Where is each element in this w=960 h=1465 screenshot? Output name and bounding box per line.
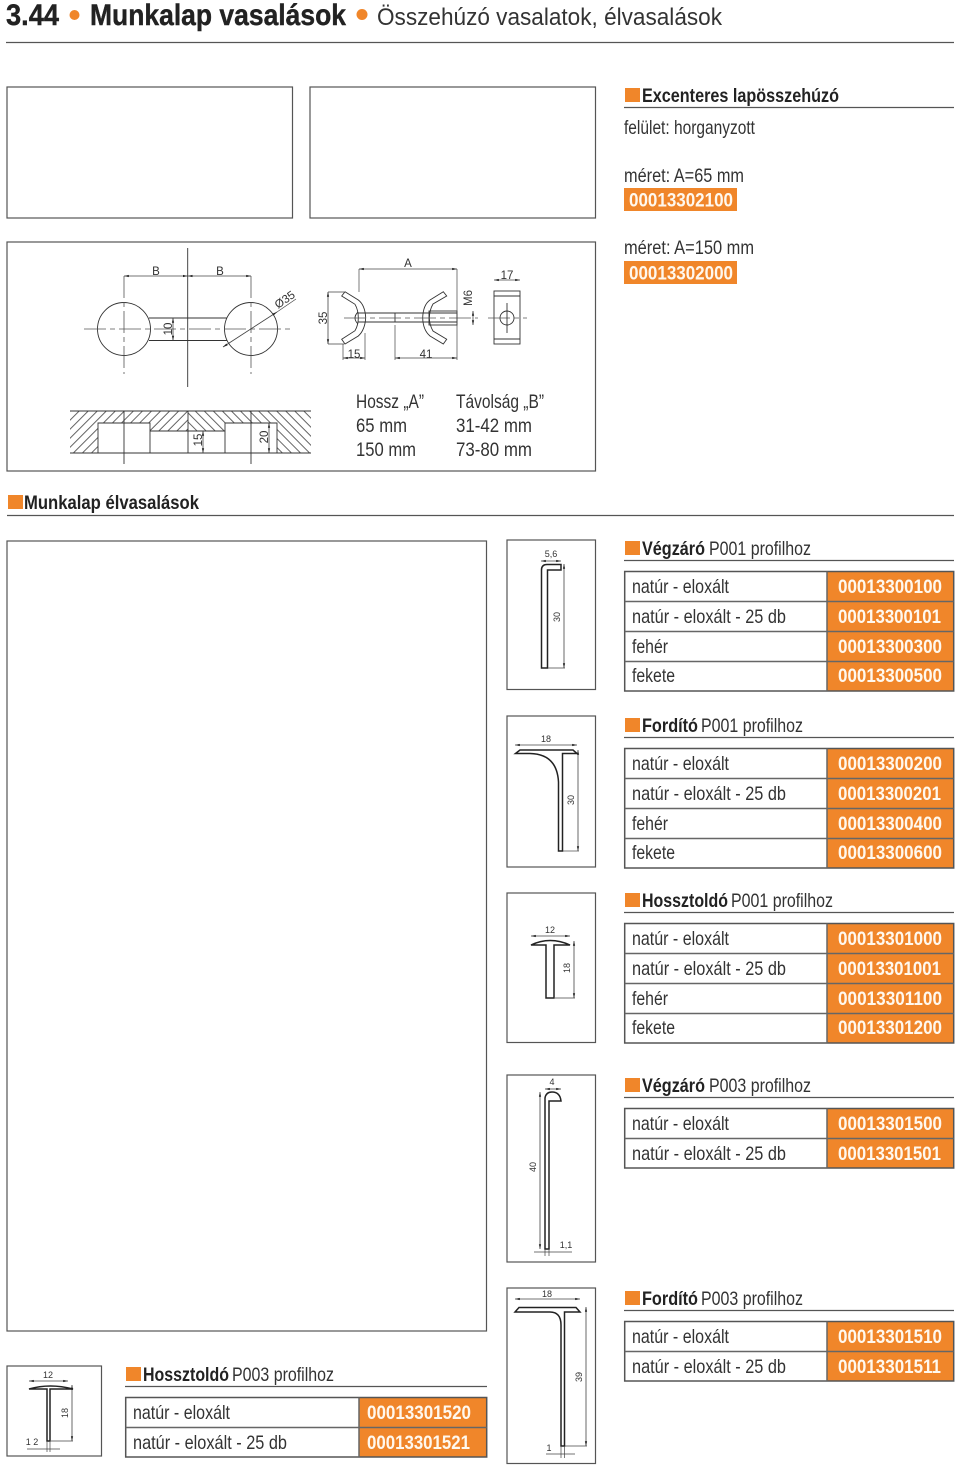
profile drawing: Fordító P001 (507, 716, 596, 867)
drawing: hatched cross-section: 20 (259, 431, 271, 443)
table: 00013301511 (838, 1356, 941, 1378)
section: Végzáró P001: P001 profilhoz (709, 538, 811, 560)
table: 00013301521 (367, 1432, 470, 1454)
table (625, 572, 954, 691)
table: natúr - eloxált - 25 db (632, 958, 786, 980)
table: natúr - eloxált (632, 928, 729, 950)
section: Hossztoldó P001: Hossztoldó (642, 890, 728, 912)
table: natúr - eloxált - 25 db (632, 783, 786, 805)
section: Végzáró P003: P003 profilhoz (709, 1075, 811, 1097)
table: 00013300201 (838, 783, 941, 805)
table (625, 924, 954, 1043)
code badge 65 mm: 00013302100 (629, 190, 733, 212)
section: Fordító P003 (624, 1288, 954, 1381)
drawing: hole plan view (84, 248, 298, 387)
section: Hossztoldó P001: P001 profilhoz (731, 890, 833, 912)
table: 00013301200 (838, 1017, 942, 1039)
profile drawing: Hossztoldó P003: 18 (60, 1408, 70, 1418)
drawing: wing bolt end view (488, 270, 527, 344)
drawing: wing bolt side view: A (404, 258, 412, 270)
profile drawing: Fordító P003: 39 (574, 1372, 584, 1382)
section: Fordító P001: Fordító (642, 715, 698, 737)
table: fekete (632, 842, 675, 864)
section: Végzáró P003 (624, 1075, 954, 1168)
dimension table: length and distance: 31-42 mm (456, 415, 532, 437)
section: Végzáró P003: Végzáró (642, 1075, 705, 1097)
table: fehér (632, 813, 668, 835)
drawing: hatched cross-section: 15 (193, 434, 205, 446)
photo panel: left (7, 87, 292, 218)
profile drawing: Végzáró P001: 30 (552, 612, 562, 622)
table: natúr - eloxált (632, 753, 729, 775)
code badge 150 mm: 00013302000 (629, 262, 733, 284)
size 150 mm: méret: A=150 mm (624, 237, 754, 259)
drawing: hole plan view: B (216, 266, 224, 278)
table: 00013301520 (367, 1402, 471, 1424)
title (6, 0, 954, 42)
table: natúr - eloxált (632, 1326, 729, 1348)
section: Hossztoldó P003: P003 profilhoz (232, 1364, 334, 1386)
section: Fordító P003: Fordító (642, 1288, 698, 1310)
profile drawing: Hossztoldó P003: 1 2 (26, 1437, 38, 1447)
panel: technical drawing of eccentric connector (7, 242, 596, 471)
table: natúr - eloxált (632, 1113, 729, 1135)
drawing: wing bolt side view (318, 258, 478, 361)
table: 00013300500 (838, 665, 942, 687)
profile drawing: Hossztoldó P003: 12 (43, 1370, 53, 1380)
panel: Excenteres lapösszehúzó info (624, 85, 954, 284)
section: Fordító P001 (624, 715, 954, 868)
table: 00013301510 (838, 1326, 942, 1348)
drawing: wing bolt side view: 15 (348, 349, 360, 361)
dimension table: length and distance: Hossz „A” (356, 391, 424, 413)
table: 00013301500 (838, 1113, 942, 1135)
section: Hossztoldó P001 (624, 890, 954, 1043)
table (625, 1322, 954, 1381)
photo panel: right (310, 87, 596, 218)
profile drawing: Végzáró P003: 4 (549, 1077, 555, 1087)
table: natúr - eloxált - 25 db (133, 1432, 287, 1454)
table: 00013300101 (838, 606, 941, 628)
dimension table: length and distance: 150 mm (356, 439, 416, 461)
table: 00013301100 (838, 988, 942, 1010)
drawing: wing bolt side view: M6 (463, 290, 475, 306)
table: 00013300600 (838, 842, 942, 864)
table: 00013301501 (838, 1143, 941, 1165)
profile drawing: Hosszt P001: 12 (545, 925, 555, 935)
table: 00013301000 (838, 928, 942, 950)
profile drawing: Végzáró P003 (507, 1075, 596, 1262)
profile drawing: Fordító P003: 1 (546, 1443, 552, 1453)
drawing: wing bolt end view: 17 (501, 270, 513, 282)
section: Fordító P003: P003 profilhoz (701, 1288, 803, 1310)
drawing: hole plan view: B (152, 266, 160, 278)
drawing: hole plan view: 10 (163, 323, 175, 335)
section: Hossztoldó P003 (125, 1364, 487, 1457)
dimension table: length and distance: 65 mm (356, 415, 407, 437)
table: fekete (632, 665, 675, 687)
heading: Excenteres lapösszehúzó (642, 85, 839, 107)
drawing: hatched cross-section (70, 411, 311, 464)
title: Összehúzó vasalatok, élvasalások (377, 4, 723, 31)
profile drawing: Végzáró P001 (507, 540, 596, 690)
heading: Munkalap élvasalások: Munkalap élvasalások (24, 492, 199, 514)
profile drawing: Hosszt P001 (507, 893, 596, 1042)
table: natúr - eloxált - 25 db (632, 1356, 786, 1378)
table: natúr - eloxált - 25 db (632, 606, 786, 628)
table: fehér (632, 988, 668, 1010)
profile drawing: Hosszt P001: 18 (562, 963, 572, 973)
profile drawing: Végzáró P003: 40 (528, 1162, 538, 1172)
profile drawing: Fordító P001: 30 (566, 795, 576, 805)
table: 00013300400 (838, 813, 942, 835)
heading: Munkalap élvasalások (7, 492, 954, 516)
profile drawing: Hossztoldó P003 (7, 1366, 102, 1456)
dimension table: length and distance (356, 391, 544, 461)
table: 00013300100 (838, 576, 942, 598)
table: 00013301001 (838, 958, 941, 980)
photo panel: large (7, 541, 486, 1331)
table (625, 1108, 954, 1168)
drawing: hole plan view: Ø35 (273, 289, 298, 311)
drawing: wing bolt side view: 35 (318, 312, 330, 324)
drawing: wing bolt side view: 41 (420, 349, 432, 361)
table (625, 748, 954, 868)
dimension table: length and distance: 73-80 mm (456, 439, 532, 461)
section: Hossztoldó P003: Hossztoldó (143, 1364, 229, 1386)
surface text: felület: horganyzott (624, 117, 755, 139)
table: natúr - eloxált (632, 576, 729, 598)
table (126, 1398, 487, 1457)
profile drawing: Végzáró P001: 5,6 (545, 549, 557, 559)
table: fekete (632, 1017, 675, 1039)
table: fehér (632, 636, 668, 658)
table: natúr - eloxált (133, 1402, 230, 1424)
section: Végzáró P001 (624, 538, 954, 691)
profile drawing: Fordító P003: 18 (542, 1289, 552, 1299)
table: 00013300300 (838, 636, 942, 658)
profile drawing: Végzáró P003: 1,1 (560, 1240, 572, 1250)
section: Végzáró P001: Végzáró (642, 538, 705, 560)
size 65 mm: méret: A=65 mm (624, 165, 744, 187)
table: natúr - eloxált - 25 db (632, 1143, 786, 1165)
section: Fordító P001: P001 profilhoz (701, 715, 803, 737)
dimension table: length and distance: Távolság „B” (456, 391, 544, 413)
profile drawing: Fordító P001: 18 (541, 734, 551, 744)
profile drawing: Fordító P003 (507, 1288, 596, 1464)
table: 00013300200 (838, 753, 942, 775)
